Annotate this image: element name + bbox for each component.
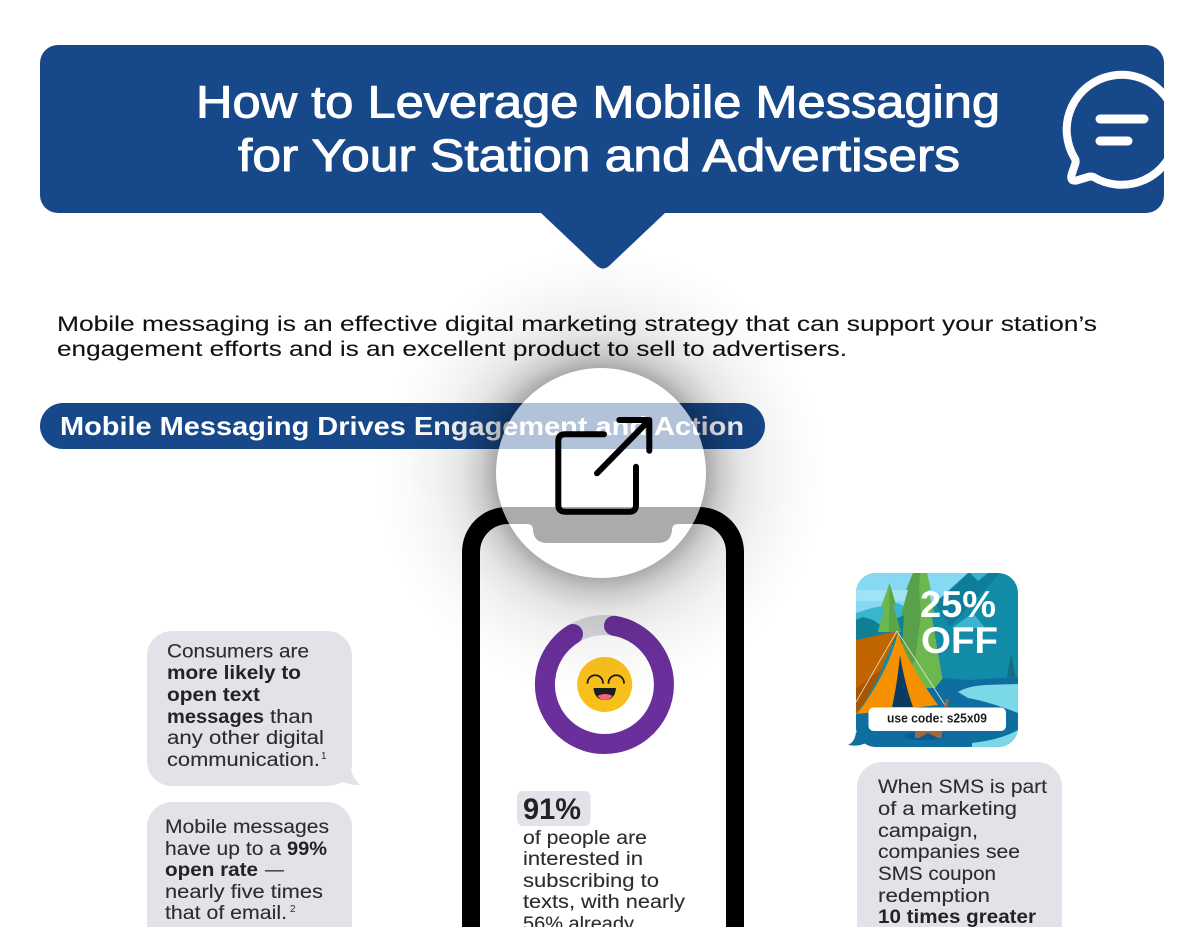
illustration: campsite scene (848, 573, 1018, 747)
message bubble: coupon redemption: SMS coupon (878, 864, 996, 885)
title: How to Leverage Mobile Messaging (196, 76, 1000, 128)
message bubble: open rate: that of email. (165, 903, 287, 924)
message bubble: open rate: nearly five times (165, 882, 323, 903)
message bubble: open rate: have up to a (165, 839, 281, 860)
phone (462, 507, 744, 927)
icon: external link (558, 420, 649, 512)
stat description: of people are (523, 828, 647, 849)
intro text (57, 312, 1097, 361)
donut chart: 91% (545, 625, 664, 744)
message bubble: open likelihood: more likely to (167, 663, 301, 684)
message bubble: open rate: open rate (165, 860, 258, 881)
discount text: 25% (920, 584, 996, 625)
message bubble: coupon redemption: redemption (878, 886, 990, 907)
section heading pill (40, 403, 765, 449)
message bubble: open rate: Mobile messages (165, 817, 329, 838)
message bubble: open likelihood: open text (167, 685, 261, 706)
stat description: interested in (523, 849, 643, 870)
message bubble: open rate: — (265, 860, 284, 881)
message bubble: open rate (147, 802, 352, 927)
message bubble: open rate: 2 (290, 904, 296, 915)
coupon image message (848, 573, 1018, 747)
stat description: texts, with nearly (523, 892, 686, 913)
label: use code: use code: s25x09 (887, 710, 987, 726)
label: use code (868, 708, 1006, 731)
spotlight overlay (376, 248, 826, 698)
title: for Your Station and Advertisers (238, 130, 960, 181)
section heading pill: Mobile Messaging Drives Engagement and Action (60, 411, 744, 441)
message bubble: coupon redemption: campaign, (878, 821, 978, 842)
message bubble: coupon redemption: of a marketing (878, 799, 1017, 820)
discount text: OFF (921, 620, 998, 661)
message bubble: open likelihood: communication. (167, 750, 320, 771)
message bubble: open likelihood: Consumers are (167, 642, 309, 662)
message bubble: coupon redemption: When SMS is part (878, 777, 1048, 798)
stat description: subscribing to (523, 871, 659, 892)
message bubble: open likelihood: any other digital (167, 728, 324, 749)
message bubble: open rate: 99% (287, 839, 327, 860)
message bubble: open likelihood: messages (167, 707, 264, 728)
icon: smiling emoji (577, 657, 632, 712)
stat description (523, 828, 686, 927)
message bubble: coupon redemption (857, 762, 1062, 927)
message bubble: open likelihood: than (270, 707, 313, 728)
intro text: Mobile messaging is an effective digital marketing strategy that can support your station’s (57, 312, 1097, 336)
discount text (920, 584, 998, 661)
stat highlight: 91%: 91% (523, 793, 581, 826)
header banner (40, 45, 1177, 268)
title (196, 76, 1000, 181)
icon: chat bubble (1067, 75, 1177, 185)
message bubble: open likelihood: 1 (321, 751, 327, 762)
message bubble: open likelihood (147, 631, 360, 786)
message bubble: coupon redemption: companies see (878, 842, 1020, 863)
intro text: engagement efforts and is an excellent product to sell to advertisers. (57, 337, 847, 361)
